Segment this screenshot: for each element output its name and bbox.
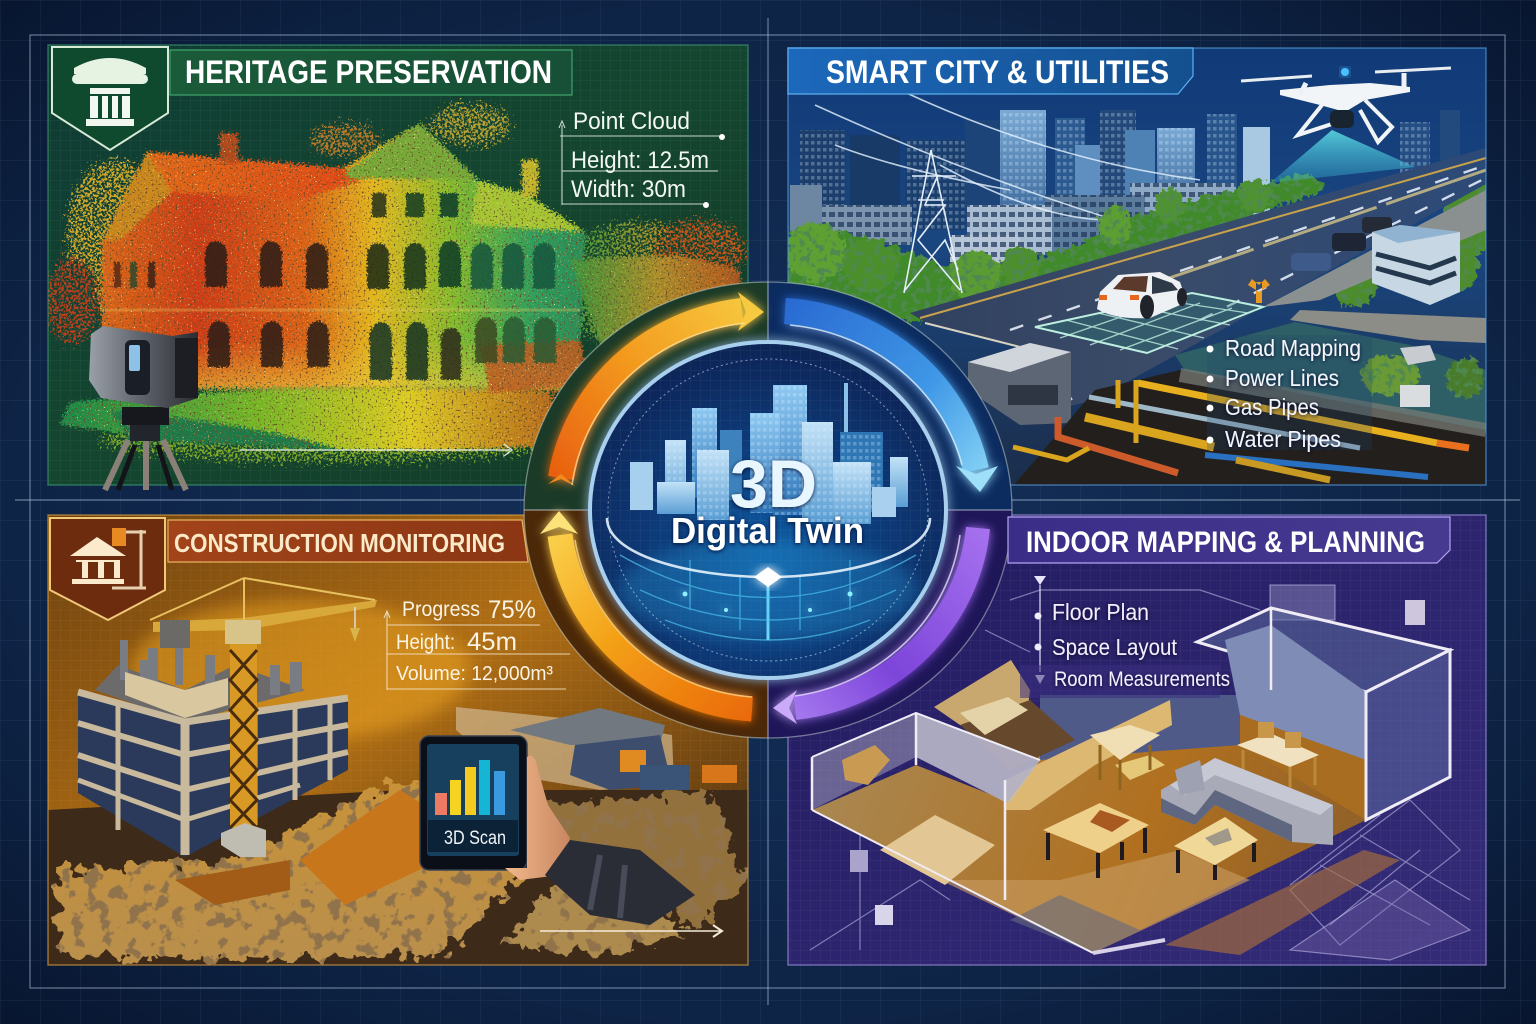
building windows (114, 193, 556, 380)
building under construction (78, 635, 348, 857)
callout: point cloud dimensions: Width: 30m (571, 176, 686, 203)
scan grid on road (1035, 293, 1263, 353)
rooftop rubble and columns (95, 635, 305, 722)
callout: construction metrics: Volume: 12,000m³ (396, 663, 553, 685)
central dark ring (524, 282, 1012, 738)
corner sofa (1161, 758, 1333, 845)
blueprint traces (810, 585, 1470, 960)
title digital twin: Digital Twin (671, 510, 864, 551)
underground utilities (1013, 370, 1486, 485)
power lines (814, 94, 1200, 220)
trees (785, 164, 1500, 322)
badge: classical column (52, 47, 168, 150)
indoor feature list: Space Layout (1052, 634, 1178, 660)
panel: indoor mapping and planning (788, 515, 1486, 965)
gatehouse (968, 343, 1071, 425)
heading: construction monitoring: CONSTRUCTION MONITORING (174, 528, 505, 558)
sidewalk and teal ground (1175, 310, 1486, 440)
heading: indoor mapping and planning (1008, 517, 1450, 563)
utility list: Water Pipes (1225, 426, 1341, 452)
excavated ground (48, 780, 748, 965)
heading: heritage preservation: HERITAGE PRESERVATION (185, 54, 552, 90)
scan width arrow (540, 925, 722, 937)
tablet label: 3D Scan (444, 828, 506, 849)
arrow: smart city to indoor (785, 311, 998, 492)
central globe: 3D digital twin (590, 342, 946, 678)
indoor feature list: Room Measurements (1054, 668, 1230, 691)
hand holding tablet (505, 756, 695, 925)
panel: heritage preservation (46, 45, 748, 485)
dining tables (1043, 803, 1258, 880)
panel: construction monitoring (48, 515, 748, 965)
title 3D: 3D (730, 446, 817, 522)
scanning drone (1241, 68, 1451, 183)
width dimension arrow (240, 444, 512, 456)
callout: construction metrics: Height: (396, 631, 455, 654)
heading: construction monitoring (168, 520, 528, 562)
scanning car (1097, 272, 1187, 319)
tower crane (150, 578, 377, 857)
heading: smart city and utilities: SMART CITY & UTILITIES (826, 54, 1169, 90)
callout: construction metrics: Progress (402, 598, 480, 621)
panel frame (48, 515, 748, 965)
room walls (812, 608, 1450, 953)
panel frame (788, 48, 1486, 485)
utility list: Power Lines (1225, 365, 1339, 391)
platform diamond (754, 567, 782, 587)
desk set (1090, 725, 1165, 790)
tablet with 3D scan chart (420, 736, 527, 870)
callout: construction metrics: 75% (488, 596, 536, 624)
other vehicles and signs (1248, 217, 1392, 303)
globe grid (590, 342, 946, 678)
transmission tower (904, 150, 962, 293)
platform ring (607, 518, 930, 577)
scanner on tripod (89, 326, 198, 490)
city skyline (790, 110, 1460, 280)
utility list (1206, 335, 1372, 452)
callout: construction metrics (384, 596, 570, 690)
panel frame (48, 45, 748, 485)
office building (1372, 225, 1460, 305)
far site building (456, 707, 737, 790)
indoor feature list (1020, 576, 1230, 698)
utility list: Road Mapping (1225, 335, 1361, 361)
digital city skyline (630, 383, 908, 524)
indoor feature list: Floor Plan (1052, 599, 1149, 625)
dining table (1237, 722, 1319, 788)
callout: point cloud dimensions: Point Cloud (573, 108, 690, 135)
badge: building and crane (50, 518, 165, 620)
heading: indoor mapping and planning: INDOOR MAPPING & PLANNING (1026, 526, 1425, 559)
arrow: construction to heritage (540, 511, 752, 709)
arrow: heritage to smart city (548, 292, 764, 486)
floor plan base (812, 700, 1400, 955)
arrow: indoor to construction (773, 528, 978, 724)
road surface (910, 148, 1486, 407)
callout: construction metrics: 45m (467, 628, 517, 656)
point cloud building (46, 105, 745, 462)
callout: point cloud dimensions: Height: 12.5m (571, 147, 709, 174)
heading: smart city and utilities (788, 48, 1193, 94)
panel: smart city and utilities (785, 48, 1500, 485)
panel frame (788, 515, 1486, 965)
utility list: Gas Pipes (1225, 394, 1319, 420)
callout: point cloud dimensions (559, 108, 725, 208)
